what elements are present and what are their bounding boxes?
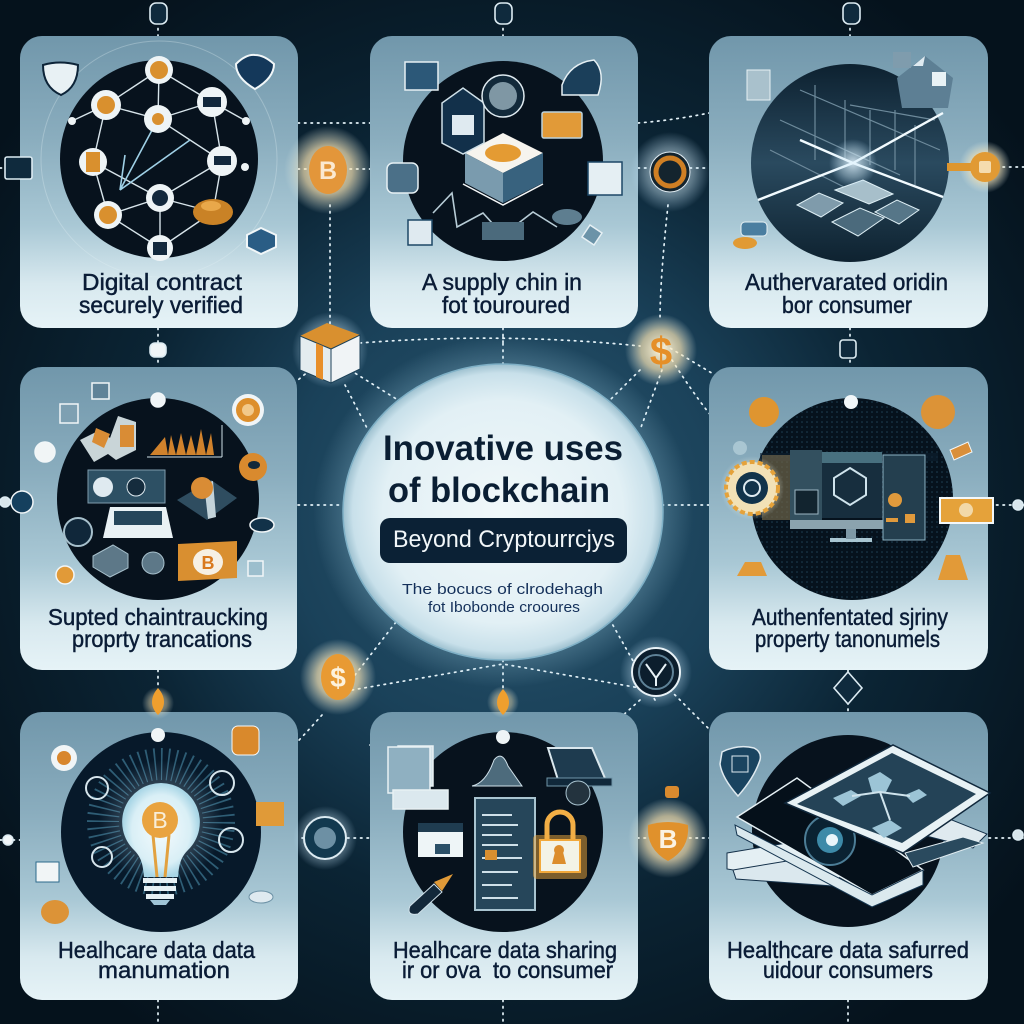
- icon: orange coin top right: [232, 394, 264, 426]
- icon: documents stack: [388, 746, 448, 809]
- center subtitle pill: [380, 518, 627, 563]
- icon: bitcoin coin bottom right: [628, 786, 708, 878]
- caption: [745, 269, 948, 318]
- caption: [752, 604, 948, 652]
- icon: flame and node: [487, 686, 519, 744]
- panel: authenticated origin: [709, 36, 1011, 328]
- caption: Digital contract: [82, 269, 243, 295]
- icon: dollar coin upper right: $: [650, 330, 672, 374]
- caption: Healhcare data sharing: [393, 937, 617, 963]
- icon: globe coin bottom: [293, 806, 357, 870]
- icon: dollar coin lower left: $: [330, 662, 346, 693]
- center subtitle pill: Beyond Cryptourrcjys: [393, 526, 615, 553]
- caption: uidour consumers: [763, 957, 933, 983]
- center title: of blockchain: [388, 471, 610, 510]
- panel: healthcare manumation: [20, 687, 298, 1000]
- circle illustration: laptop and cubes: [57, 398, 259, 600]
- caption: ir or ova to consumer: [402, 957, 613, 983]
- caption: [727, 937, 969, 983]
- panel: healthcare safeguarded: [709, 712, 990, 1000]
- icons around circle: [387, 60, 622, 245]
- caption: fot touroured: [442, 292, 570, 318]
- caption: securely verified: [79, 292, 243, 318]
- icon: orange coin on right: [947, 141, 1011, 193]
- caption: [422, 269, 582, 318]
- icon: shield: [720, 747, 760, 796]
- center note: [402, 581, 603, 616]
- icon: shields around circle: [43, 55, 276, 254]
- icon: gold ticket: [940, 498, 993, 523]
- caption: Supted chaintraucking: [48, 604, 268, 630]
- circle illustration: light bulb: B: [152, 807, 168, 833]
- caption: Authervarated oridin: [745, 269, 948, 295]
- icon: warehouse: [893, 52, 953, 108]
- circle illustration: document and padlock: [403, 732, 612, 932]
- panel: property transactions: [11, 367, 297, 670]
- circle illustration: warehouse and light beams: [751, 64, 949, 262]
- circle illustration: tablet and cards: [727, 735, 990, 927]
- icons around circle: [11, 383, 274, 584]
- icon: bitcoin coin bottom right: B: [659, 824, 677, 854]
- caption: property tanonumels: [755, 626, 940, 652]
- panel: authenticated property: [709, 367, 993, 670]
- icon: flame: [142, 687, 174, 719]
- icon: bitcoin coin top left: [284, 126, 372, 214]
- caption: [48, 604, 268, 652]
- icon: padlock: [533, 812, 587, 879]
- center note: The bocucs of clrodehagh: [402, 581, 603, 598]
- icon: gold gear coin: [720, 456, 784, 520]
- center note: fot Ibobonde crooures: [428, 599, 580, 616]
- caption: [393, 937, 617, 983]
- circle illustration: monitor: [751, 398, 953, 600]
- center circle: [313, 336, 693, 688]
- icon: dark coin lower right: [620, 636, 692, 708]
- icon: pen: [409, 874, 453, 914]
- icon: gift box: [292, 312, 368, 388]
- icons around circle: [733, 395, 972, 580]
- center title: [383, 429, 623, 510]
- icon: bitcoin coin top left: B: [319, 157, 337, 185]
- circle illustration: block and chart: [403, 61, 603, 261]
- icons around circle: [36, 726, 284, 924]
- panel: digital contract: [20, 36, 298, 328]
- circle illustration: laptop and cubes: B: [202, 553, 214, 573]
- caption: Healthcare data safurred: [727, 937, 969, 963]
- caption: Authenfentated sjriny: [752, 604, 948, 630]
- icon: flaming rocket: [239, 453, 267, 481]
- circle illustration: light bulb: [61, 732, 261, 932]
- panel: supply chain: [370, 36, 638, 328]
- caption: [79, 269, 243, 318]
- caption: proprty trancations: [72, 626, 252, 652]
- icon: dark coin top right: [630, 132, 710, 212]
- orbit ring: [41, 41, 277, 277]
- caption: bor consumer: [782, 292, 912, 318]
- icon: tower left: [747, 70, 770, 100]
- icon: dollar coin upper right: [625, 314, 697, 386]
- circle illustration: node network: [60, 56, 258, 261]
- icon: tags lower left: [733, 222, 767, 249]
- caption: manumation: [98, 957, 230, 983]
- panel: healthcare sharing: [370, 686, 638, 1000]
- center title: Inovative uses: [383, 429, 623, 468]
- caption: Healhcare data data: [58, 937, 255, 963]
- icon: dollar coin lower left: [300, 639, 376, 715]
- caption: A supply chin in: [422, 269, 582, 295]
- caption: [58, 937, 255, 983]
